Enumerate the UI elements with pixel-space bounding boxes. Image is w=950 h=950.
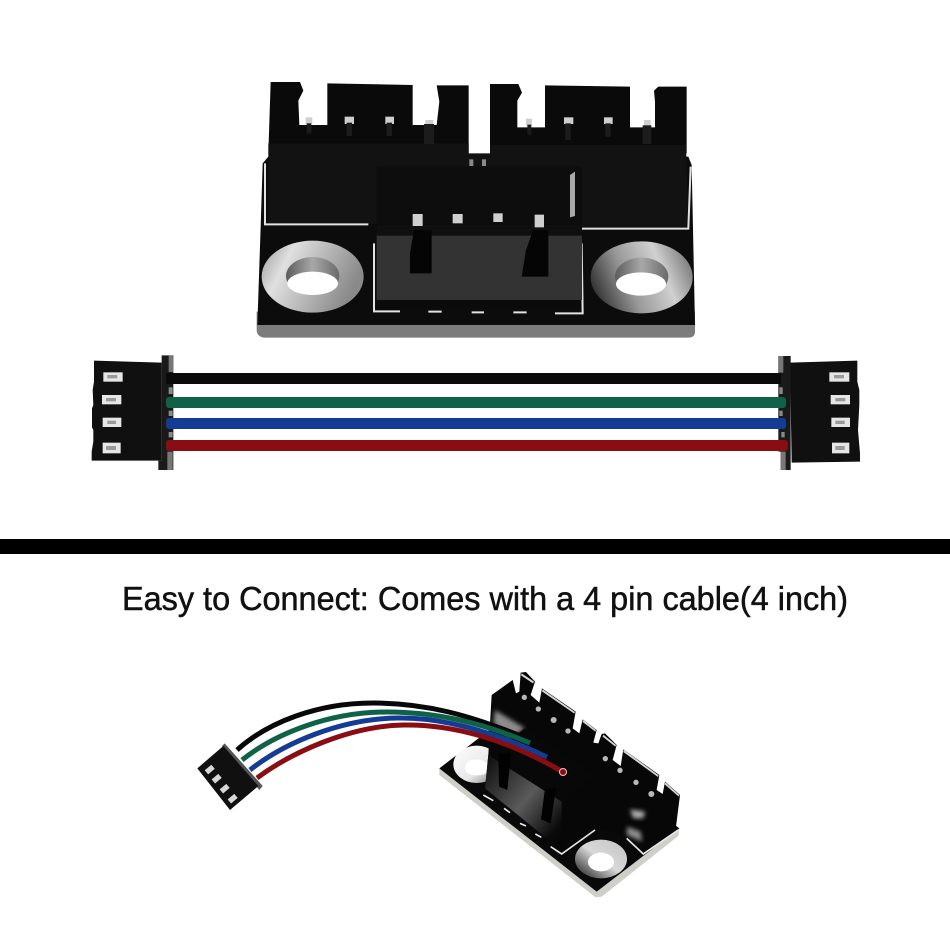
latch tabs bbox=[410, 230, 432, 273]
center connector top face bbox=[488, 728, 595, 802]
left plug bbox=[92, 355, 173, 470]
board edge bbox=[257, 312, 695, 338]
pins bbox=[306, 117, 651, 227]
divider bar bbox=[0, 539, 950, 554]
center connector bbox=[377, 167, 581, 235]
latch tabs bbox=[498, 753, 511, 790]
wire: black bbox=[237, 703, 523, 750]
wire: green bbox=[166, 397, 786, 408]
module bbox=[439, 672, 680, 897]
left washer bbox=[453, 746, 500, 783]
rear connector glare bbox=[493, 710, 525, 738]
rim highlights bbox=[521, 673, 679, 797]
board face bbox=[439, 705, 679, 892]
connector shroud bbox=[268, 143, 688, 227]
center connector front face bbox=[485, 755, 562, 851]
heading: Easy to Connect: Comes with a 4 pin cable(4 inch) bbox=[122, 580, 848, 617]
right washer bbox=[575, 840, 627, 878]
connector silhouette bbox=[485, 672, 680, 854]
right plug bbox=[778, 356, 860, 470]
wire end at socket bbox=[560, 768, 566, 776]
image: top-view splitter board bbox=[257, 82, 695, 338]
board edge bbox=[439, 768, 679, 897]
front connector glare bbox=[630, 809, 645, 818]
right washer bbox=[591, 241, 693, 313]
wire: red bbox=[166, 440, 788, 451]
wire: black bbox=[166, 373, 781, 384]
wire: blue bbox=[166, 418, 786, 429]
silkscreen pads bbox=[483, 795, 678, 854]
pin highlights bbox=[522, 695, 654, 797]
image: 4 pin cable, straight view bbox=[92, 355, 860, 470]
cable wires bbox=[237, 703, 563, 778]
image: module with connected cable bbox=[197, 672, 680, 897]
wire: green bbox=[242, 712, 530, 760]
wire: red bbox=[257, 725, 563, 778]
left top connector bbox=[268, 82, 469, 153]
left washer bbox=[262, 241, 364, 313]
right top connector bbox=[490, 84, 687, 153]
board face bbox=[257, 157, 695, 325]
silkscreen outlines bbox=[265, 163, 691, 313]
wire: blue bbox=[250, 718, 547, 770]
free plug bbox=[197, 743, 263, 810]
